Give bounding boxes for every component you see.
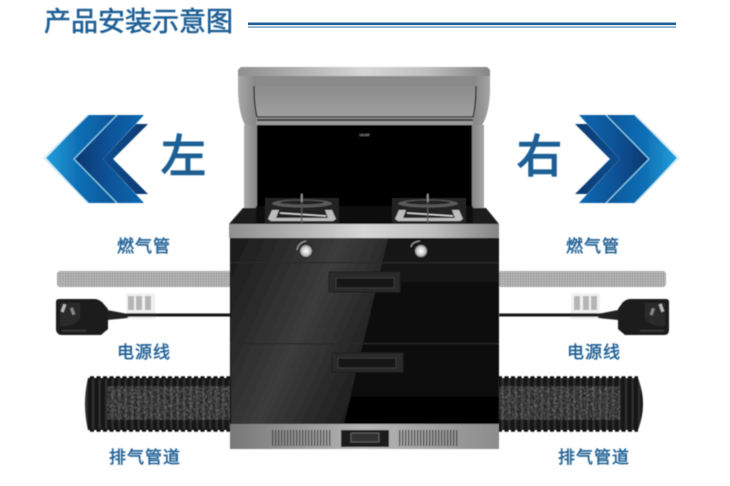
stove: right knob: [411, 241, 428, 258]
label: power cable right: 电源线: [567, 343, 621, 362]
stove: hood glass panel: [254, 86, 476, 125]
exhaust duct left: [85, 378, 232, 430]
stove: black back panel: [257, 125, 472, 225]
label: right: 右: [517, 131, 562, 182]
stove: left knob: [297, 241, 312, 258]
label: gas pipe left: 燃气管: [117, 237, 171, 256]
stove: steel front band: [229, 224, 499, 238]
label: left: 左: [161, 131, 206, 182]
gas pipe left: [57, 271, 232, 287]
label: exhaust duct right: 排气管道: [558, 448, 630, 467]
stove: right burner: [392, 194, 466, 224]
stove: lower drawer handle: [332, 353, 403, 372]
stove: upper drawer handle: [329, 272, 400, 292]
stove: right vent: [399, 430, 457, 446]
stove: brand mark: uroder: [359, 133, 370, 137]
label: exhaust duct left: 排气管道: [109, 448, 181, 467]
exhaust duct right: [498, 378, 643, 430]
icon: right arrow: [575, 115, 679, 203]
stove: hood shell: [238, 67, 490, 224]
stove: centre drain box: [341, 430, 389, 447]
power cord left: [56, 293, 232, 335]
title rule: [248, 22, 676, 28]
integrated stove: [229, 67, 499, 449]
label: power cable left: 电源线: [117, 343, 171, 362]
stove: cabinet body: [230, 238, 499, 425]
stove: left vent: [272, 430, 330, 446]
stove: left burner: [265, 194, 339, 224]
stove: bottom steel plinth: [230, 424, 499, 449]
title: 产品安装示意图: [44, 7, 233, 37]
power cord right: [499, 293, 669, 335]
icon: left arrow: [44, 115, 148, 203]
label: gas pipe right: 燃气管: [566, 237, 620, 256]
gas pipe right: [498, 271, 666, 287]
stove: cooktop: [229, 208, 499, 224]
